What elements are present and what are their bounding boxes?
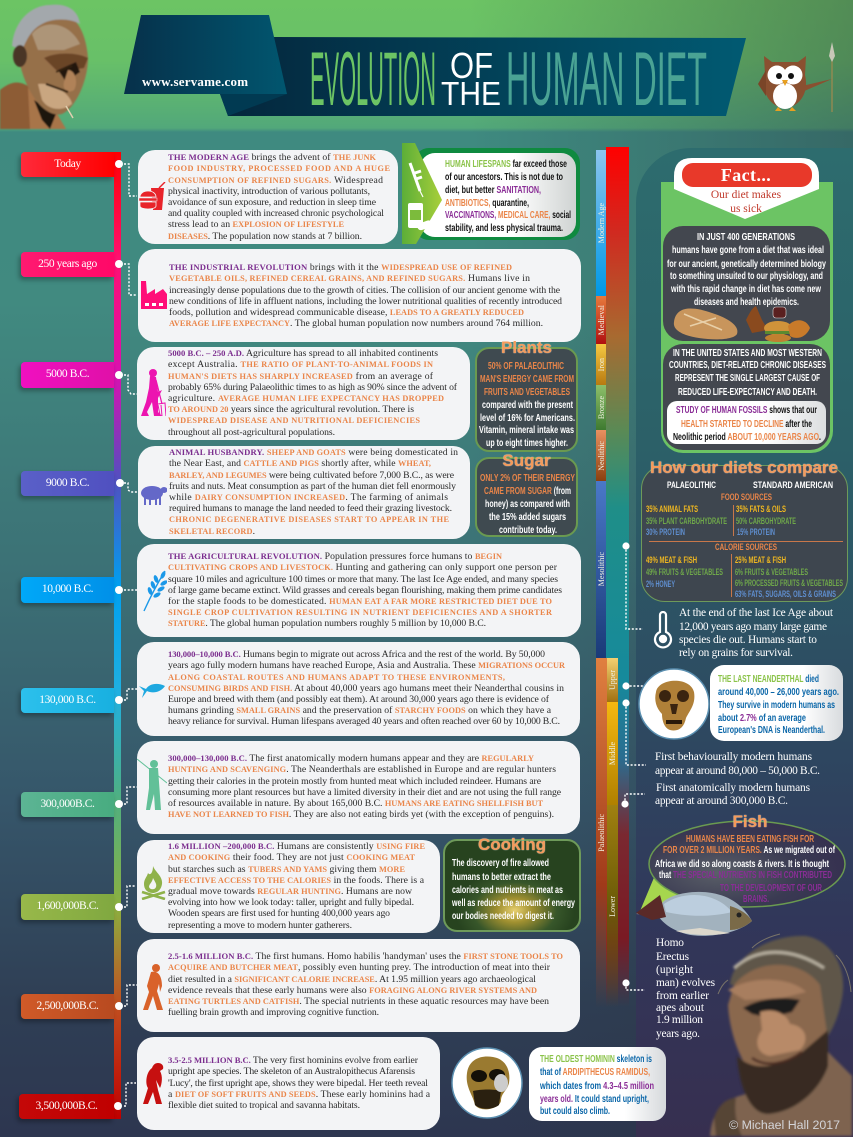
- panel: 5000 BC to 250 AD: [137, 347, 470, 440]
- text: agricultural revolution: STATURE. The global human population numbers roughly 5 million by 10,000 B.C.: [168, 618, 486, 629]
- text: animal husbandry: ANIMAL HUSBANDRY. SHEEP AND GOATS were being domesticated in: [169, 447, 458, 458]
- panel: western diseases: [663, 344, 830, 450]
- text: homo erectus: apes about: [656, 1002, 705, 1014]
- text: last neanderthal: [710, 665, 843, 741]
- text: first modern humans: of resources available in nature. By about 165,000 B.C. HUMANS ARE EATING SHELLFISH BUT: [168, 798, 543, 809]
- text: end of the ice age: species die out. Humans start to: [679, 634, 817, 646]
- text: first hominins: 'Lucy', the first upright ape, shows they were bipedal. Her teeth reveal: [168, 1078, 428, 1089]
- text: migrations: ALONG COASTAL ROUTES AND HUMANS ADAPT TO THESE ENVIRONMENTS,: [168, 673, 505, 682]
- text: lifespans: diet, but better SANITATION,: [445, 184, 541, 196]
- text: first humans: evidence reveals that these early humans were also FORAGING ALONG RIVER SYSTEMS AND: [168, 985, 537, 996]
- timeline connectors: [124, 163, 137, 1107]
- era: Upper: [607, 658, 618, 702]
- text: 5000 BC: agriculture. AVERAGE HUMAN LIFE EXPECTANCY HAS DROPPED: [168, 393, 444, 404]
- text: animal husbandry: required humans to manage the land needed to feed their grazing livestock.: [169, 503, 452, 514]
- icon: sheep: [141, 486, 167, 505]
- table: food and calorie sources: 15% PROTEIN: [736, 526, 775, 538]
- era: Neolithic: [596, 430, 606, 481]
- icon: farmer with pitchfork: [141, 369, 166, 416]
- text: first hominins: [168, 1055, 431, 1111]
- text: 400 generations: [667, 231, 826, 308]
- heading: sugar: Sugar: [502, 451, 551, 470]
- text: industrial revolution: new conditions of life in affluent nations, including the lower nutritional qualities of recently introduced: [169, 296, 562, 307]
- text: industrial revolution: THE INDUSTRIAL REVOLUTION brings with it the WIDESPREAD USE OF REFINED: [169, 262, 512, 273]
- text: oldest hominin: but could also climb.: [540, 1105, 610, 1117]
- era: Bronze: Bronze: [596, 396, 606, 419]
- text: modern age: stress lead to an EXPLOSION OF LIFESTYLE: [168, 219, 344, 230]
- era: Mesolithic: Mesolithic: [596, 552, 606, 587]
- icon: green arrow tab with syringe and pills: [402, 143, 442, 244]
- table: food and calorie sources: 49% FRUITS & VEGETABLES: [646, 566, 723, 578]
- text: sugar: [480, 472, 575, 536]
- panel: fish speech bubble: [636, 810, 848, 938]
- icon: factory: [141, 281, 167, 309]
- text: agricultural revolution: for the staple foods to be domesticated. HUMAN EAT A FAR MORE RESTRICTED DIET DUE TO: [168, 596, 553, 607]
- label: 1,600,000 B.C.: 1,600,000B.C.: [37, 900, 98, 912]
- panel: 3.5 to 2.5 million BC: [137, 1037, 440, 1130]
- label: 10,000 B.C.: [21, 577, 114, 603]
- era: Mesolithic: [596, 481, 606, 658]
- panel: right column background: [636, 148, 853, 1137]
- text: homo erectus: [652, 936, 720, 1042]
- text: agricultural revolution: square 10 miles and agriculture 100 times or more that many. The last Ice Age ended, and many species: [168, 574, 558, 585]
- text: 5000 BC: [168, 348, 458, 438]
- heading: fact banner: [674, 158, 819, 219]
- text: first modern humans: getting their calories in the protein mostly from hunted meat which included reindeer. Humans are: [168, 776, 541, 787]
- text: first modern humans: 300,000–130,000 B.C. The first anatomically modern humans appear and they are REGULARLY: [168, 753, 534, 764]
- table: food and calorie sources: PALAEOLITHIC: [666, 480, 716, 490]
- table: food and calorie sources: [646, 480, 843, 600]
- icon: campfire: [142, 866, 166, 900]
- label: 9000 B.C.: [21, 471, 114, 496]
- table: food and calorie sources: 35% FATS & OILS: [736, 504, 786, 514]
- text: behaviourally modern humans: First behaviourally modern humans: [655, 751, 813, 763]
- era: Lower: [607, 805, 618, 1008]
- text: first humans: fuelling brain growth and improving cognitive function.: [168, 1007, 379, 1018]
- text: 5000 BC: HUMAN'S DIETS HAS SHARPLY INCREASED from an average of: [168, 371, 434, 382]
- label: 9000 B.C.: 9000 B.C.: [46, 477, 89, 489]
- text: homo erectus: man) evolves: [656, 977, 716, 989]
- table: food and calorie sources: CALORIE SOURCES: [714, 542, 777, 552]
- era: Lower: Lower: [608, 896, 617, 917]
- image: fish: [636, 888, 756, 938]
- era: Neolithic: Neolithic: [596, 441, 606, 470]
- heading: fact banner: us sick: [730, 203, 762, 215]
- panel: human lifespans: [402, 143, 580, 244]
- text: behaviourally modern humans: appear at around 80,000 – 50,000 B.C.: [655, 765, 820, 777]
- panel: the agricultural revolution: [137, 544, 581, 637]
- text: industrial revolution: increasingly dense populations due to the growth of cities. The collision of our ancient genome with the: [169, 285, 560, 296]
- panel: 2.5 to 1.6 million BC: [137, 939, 580, 1032]
- text: end of the ice age: [675, 604, 840, 662]
- text: animal husbandry: while DAIRY CONSUMPTION INCREASED. The farming of animals: [169, 492, 448, 503]
- text: first humans: EATING TURTLES AND CATFISH. The special nutrients in these aquatic resources may have been: [168, 996, 549, 1007]
- panel: animal husbandry: [138, 446, 470, 539]
- text: agricultural revolution: CULTIVATING CROPS AND LIVESTOCK. Hunting and gathering can only support one person per: [168, 562, 558, 573]
- era: Palaeolithic: Palaeolithic: [597, 814, 606, 852]
- label: 3,500,000 B.C.: [19, 1094, 114, 1119]
- text: behaviourally modern humans: [650, 748, 825, 779]
- text: industrial revolution: AVERAGE LIFE EXPECTANCY. The global human population now numbers around 764 million.: [169, 318, 543, 329]
- text: lifespans: [445, 158, 571, 234]
- text: first modern humans: HUNTING AND SCAVENGING. The Neanderthals are established in Europe and are regular hunters: [168, 764, 556, 775]
- text: animal husbandry: the Near East, and CATTLE AND PIGS shortly after, while WHEAT,: [169, 458, 431, 469]
- panel: how our diets compare: [641, 465, 848, 602]
- text: industrial revolution: foods, pollution and widespread communicable disease, LEADS TO A GREATLY REDUCED: [169, 307, 524, 318]
- panel: the modern age: [138, 150, 398, 244]
- panel: plants: [475, 347, 578, 452]
- text: migrations: CONSUMING BIRDS AND FISH. At about 40,000 years ago humans meet their Neanderthal cousins in: [168, 683, 564, 694]
- panel: 130,000 to 10,000 BC: [137, 642, 580, 736]
- label: 10,000 B.C.: 10,000 B.C.: [42, 583, 93, 595]
- text: fire and cooking: gradual move towards REGULAR HUNTING. Humans are now: [168, 886, 412, 897]
- image: caveman portrait: [0, 4, 89, 130]
- text: fire and cooking: [168, 841, 425, 931]
- text: migrations: Europe and breed with them (and possibly eat them). At around 30,000 years ago there is evidence of: [168, 694, 550, 705]
- label: Today: [21, 152, 114, 177]
- label: 250 years ago: [21, 252, 114, 277]
- text: animal husbandry: [169, 447, 458, 537]
- table: food and calorie sources: 25% MEAT & FISH: [734, 554, 786, 566]
- text: modern age: FOOD INDUSTRY, PROCESSED FOOD AND A HUGE: [168, 164, 390, 173]
- text: modern age: [168, 152, 390, 242]
- timeline spine: [114, 152, 121, 1119]
- text: first modern humans: consuming more plant resources but have a limited diversity in their diet and are not using the full range: [168, 787, 561, 798]
- label: 5000 B.C.: 5000 B.C.: [46, 368, 89, 380]
- era timeline column: [596, 147, 629, 1004]
- icon: burger and drink: [139, 182, 166, 210]
- era: Iron: Iron: [596, 358, 606, 371]
- title: OF: [450, 45, 493, 86]
- text: first modern humans: [168, 753, 561, 820]
- text: first humans: [168, 951, 564, 1018]
- text: lifespans: VACCINATIONS, MEDICAL CARE, social: [445, 209, 571, 221]
- text: migrations: heavy reliance for survival. Human lifespans averaged 40 years and often reached over 60 by 10,000 B.C.: [168, 716, 560, 727]
- era: Bronze: [596, 385, 606, 430]
- table: food and calorie sources: 30% PROTEIN: [646, 526, 685, 538]
- text: modern age: avoidance of sun exposure, and reduction in sleep time: [168, 197, 376, 208]
- text: migrations: [168, 649, 566, 727]
- text: animal husbandry: SKELETAL RECORD.: [169, 526, 255, 537]
- label: 130,000 B.C.: 130,000 B.C.: [39, 694, 96, 706]
- icon: hunter with spear: [137, 758, 167, 810]
- text: modern age: CONSUMPTION OF REFINED SUGARS. Widespread: [168, 175, 383, 186]
- heading: cooking: Cooking: [478, 835, 546, 854]
- text: fish: [636, 810, 848, 938]
- text: end of the ice age: 12,000 years ago many large game: [679, 621, 827, 633]
- text: modern age: DISEASES. The population now stands at 7 billion.: [168, 231, 362, 242]
- image: hominin skull in circle: [451, 1047, 523, 1119]
- text: agricultural revolution: [168, 551, 562, 629]
- text: migrations: 130,000–10,000 B.C. Humans begin to migrate out across Africa and the rest of the world. By 50,000: [168, 649, 545, 660]
- era: Upper: Upper: [608, 670, 617, 690]
- label: 2,500,000 B.C.: [21, 994, 114, 1019]
- text: first humans: ACQUIRE AND BUTCHER MEAT, possibly even hunting prey. The introduction of meat into their: [168, 962, 551, 973]
- text: anatomically modern humans: appear at around 300,000 B.C.: [655, 795, 788, 807]
- image: neanderthal skull in circle: [638, 668, 710, 740]
- text: homo erectus: from earlier: [656, 990, 709, 1002]
- text: end of the ice age: At the end of the last Ice Age about: [679, 607, 834, 619]
- label: 300,000 B.C.: [21, 792, 114, 817]
- text: agricultural revolution: THE AGRICULTURAL REVOLUTION. Population pressures force humans to BEGIN: [168, 551, 502, 562]
- text: last neanderthal: about 2.7% of an average: [718, 712, 806, 724]
- text: agricultural revolution: SINGLE CROP CULTIVATION RESULTING IN NUTRIENT DEFICIENCIES AND A SHORTER: [168, 608, 553, 617]
- text: first hominins: flexible diet suited to tropical and savanna habitats.: [168, 1100, 360, 1111]
- right column connectors: [621, 542, 646, 991]
- text: modern age: physical inactivity, introduction of various pollutants,: [168, 186, 370, 197]
- text: industrial revolution: [169, 262, 562, 329]
- text: modern age: THE MODERN AGE brings the advent of THE JUNK: [168, 152, 377, 163]
- callout: study of human fossils: [667, 401, 826, 444]
- text: homo erectus: Homo: [656, 937, 684, 949]
- icon: owl mascot with spear: [758, 42, 835, 112]
- text: fire and cooking: evolving into how we look today: taller, upright and fully bipedal.: [168, 897, 414, 908]
- era: Medieval: [596, 296, 606, 344]
- text: western countries: [669, 347, 826, 398]
- text: homo erectus: years ago.: [656, 1028, 700, 1040]
- text: oldest hominin: [539, 1053, 654, 1117]
- text: 5000 BC: TO AROUND 20 years since the agricultural revolution. There is: [168, 404, 414, 415]
- heading: fact banner: Our diet makes: [711, 189, 782, 201]
- text: agricultural revolution: of large game became extinct. Wild grasses and cereals began flourishing, making them prime candidates: [168, 585, 562, 596]
- icon: thermometer: [653, 611, 673, 650]
- table: food and calorie sources: 35% ANIMAL FATS: [646, 504, 698, 514]
- label: 130,000 B.C.: [21, 688, 114, 713]
- image: bread and fast food: [674, 306, 810, 342]
- text: animal husbandry: BARLEY, AND LEGUMES were being cultivated before 7,000 B.C., as were: [169, 470, 454, 481]
- text: first modern humans: HAVE NOT LEARNED TO FISH. They are also not eating birds yet (with the exception of penguins).: [168, 809, 554, 820]
- text: fire and cooking: EFFECTIVE ACCESS TO THE CALORIES in the foods. There is a: [168, 875, 425, 886]
- text: anatomically modern humans: First anatomically modern humans: [656, 782, 811, 794]
- heading: plants: Plants: [501, 338, 552, 357]
- text: 5000 BC: WIDESPREAD DISEASE AND NUTRITIONAL DEFICIENCIES: [168, 416, 420, 425]
- icon: wheat: [143, 570, 167, 612]
- era: Modern Age: Modern Age: [596, 203, 606, 243]
- text: migrations: years ago fully modern humans have reached Europe, Asia and Australia. These MIGRATIONS OCCUR: [168, 660, 566, 671]
- text: fire and cooking: AND COOKING their food. They are not just COOKING MEAT: [168, 852, 415, 863]
- text: migrations: humans grinding SMALL GRAINS and the preservation of STARCHY FOODS on which they have a: [168, 705, 552, 716]
- panel: the industrial revolution: [138, 249, 581, 342]
- text: plants: [479, 360, 575, 449]
- text: end of the ice age: rely on grains for survival.: [679, 647, 793, 659]
- text: animal husbandry: CHRONIC DEGENERATIVE DISEASES START TO APPEAR IN THE: [169, 515, 449, 524]
- text: fire and cooking: 1.6 MILLION –200,000 B.C. Humans are consistently USING FIRE: [168, 841, 425, 852]
- label: 3,500,000 B.C.: 3,500,000B.C.: [36, 1100, 97, 1112]
- table: food and calorie sources: FOOD SOURCES: [720, 492, 772, 502]
- panel: sugar: [475, 457, 578, 537]
- icon: hominin figure: [143, 1063, 164, 1104]
- text: homo erectus: 1.9 million: [656, 1014, 703, 1026]
- panel: last neanderthal: [710, 665, 843, 741]
- era: Middle: [607, 702, 618, 805]
- era: Medieval: Medieval: [596, 305, 606, 335]
- table: food and calorie sources: 49% MEAT & FISH: [646, 554, 697, 566]
- heading: how our diets compare: How our diets compare: [650, 458, 838, 477]
- text: homo erectus: (upright: [656, 964, 694, 976]
- image: homo erectus portrait: [709, 934, 853, 1137]
- era: Modern Age: [596, 150, 606, 296]
- label: 2,500,000 B.C.: 2,500,000B.C.: [37, 1000, 98, 1012]
- text: 5000 BC: throughout all post-agricultural populations.: [168, 427, 335, 438]
- label: 5000 B.C.: [21, 362, 114, 388]
- era: Middle: Middle: [608, 742, 617, 765]
- text: first humans: 2.5-1.6 MILLION B.C. The first humans. Homo habilis 'handyman' uses the FIRST STONE TOOLS TO: [168, 951, 564, 962]
- icon: homo habilis figure: [143, 964, 163, 1010]
- heading: fact banner: Fact...: [721, 165, 771, 185]
- panel: 300,000 to 130,000 BC: [137, 741, 580, 834]
- text: first hominins: upright ape species. The skeleton of an Australopithecus Afarensis: [168, 1066, 415, 1077]
- heading: fish: Fish: [733, 812, 767, 831]
- table: food and calorie sources: 50% CARBOHYDRATE: [736, 516, 796, 526]
- text: lifespans: ANTIBIOTICS, quarantine,: [445, 197, 529, 209]
- table: food and calorie sources: 35% PLANT CARBOHYDRATE: [646, 516, 727, 526]
- table: food and calorie sources: 2% HONEY: [646, 578, 675, 590]
- header banner ribbon: [124, 15, 746, 116]
- text: industrial revolution: VEGETABLE OILS, REFINED CEREAL GRAINS, AND REFINED SUGARS. Humans live in: [169, 273, 530, 284]
- text: cooking: [451, 857, 575, 922]
- text: anatomically modern humans: [650, 779, 825, 810]
- panel: in just 400 generations: [663, 226, 830, 341]
- text: first hominins: a DIET OF SOFT FRUITS AND SEEDS. These early hominins had a: [168, 1089, 431, 1100]
- text: copyright: © Michael Hall 2017: [729, 1118, 840, 1132]
- text: 5000 BC: 5000 B.C. – 250 A.D. Agriculture has spread to all inhabited continents: [168, 348, 438, 359]
- panel: oldest hominin: [529, 1047, 666, 1121]
- text: fire and cooking: Wooden spears are first used for hunting 400,000 years ago: [168, 908, 390, 919]
- panel: fact green card: [661, 182, 833, 453]
- era: Palaeolithic: [596, 658, 607, 1008]
- text: fire and cooking: representing a move to modern hunter gatherers.: [168, 920, 352, 931]
- text: first hominins: 3.5-2.5 MILLION B.C. The very first hominins evolve from earlier: [168, 1055, 419, 1066]
- text: fish: BRAINS.: [743, 893, 769, 905]
- panel: cooking: [443, 839, 581, 932]
- label: Today: Today: [54, 158, 81, 170]
- icon: fish: [139, 684, 165, 698]
- text: animal husbandry: fruits and nuts. Meat consumption as part of the human diet fell enormously: [169, 481, 456, 492]
- website address: www.servame.com: [142, 74, 248, 89]
- label: 1,600,000 B.C.: [21, 894, 114, 920]
- panel: 1.6 million to 200,000 BC: [137, 840, 440, 933]
- text: fire and cooking: but starches such as TUBERS AND YAMS giving them MORE: [168, 864, 405, 875]
- text: homo erectus: Erectus: [656, 951, 690, 963]
- text: 5000 BC: probably 65% during Palaeolithic times to as high as 90% since the advent of: [168, 382, 458, 393]
- text: modern age: and quality coupled with increased chronic psychological: [168, 208, 384, 219]
- label: 300,000 B.C.: 300,000B.C.: [40, 798, 95, 810]
- label: 250 years ago: 250 years ago: [38, 258, 97, 270]
- text: first humans: diet resulted in a SIGNIFICANT CALORIE INCREASE. At 1.95 million years ago archaeological: [168, 974, 536, 985]
- era: Iron: [596, 344, 606, 385]
- text: 5000 BC: except Australia. THE RATIO OF PLANT-TO-ANIMAL FOODS IN: [168, 359, 433, 370]
